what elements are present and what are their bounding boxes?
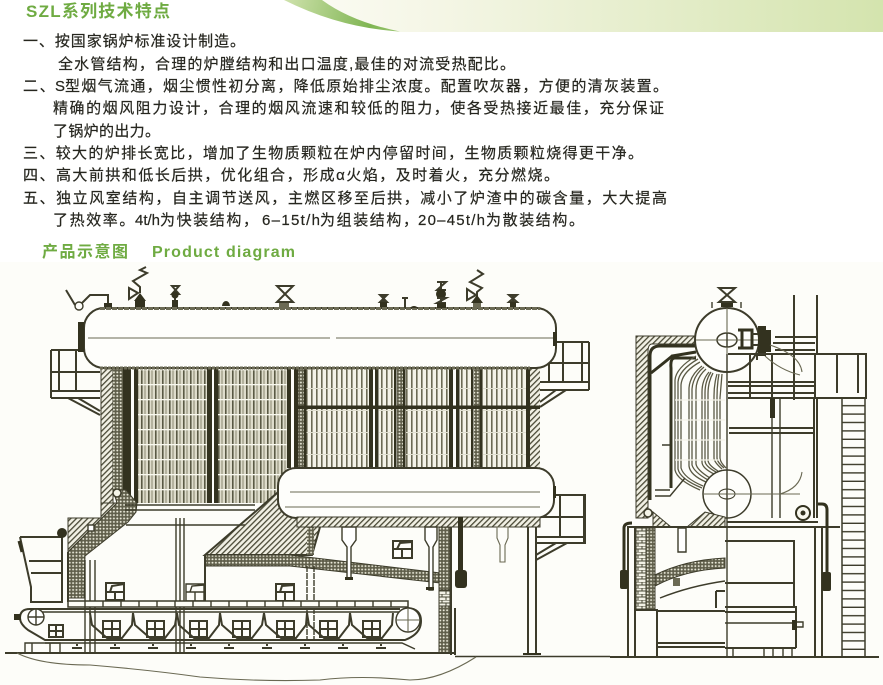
rear wall and right column (439, 527, 541, 655)
text block: feature list: 精确的烟风阻力设计，合理的烟风流速和较低的阻力，使各受热接近最佳，充分保证 (53, 99, 664, 117)
section heading: product diagram: 产品示意图 (42, 242, 128, 261)
funnels with air-chamber windows (49, 613, 393, 638)
side columns and spring pipes (620, 504, 831, 657)
grate bars (68, 601, 408, 607)
text block: feature list: 型烟气流通，烟尘惯性初分离，降低原始排尘浓度。配置吹灰器，方便的清灰装置。 (65, 78, 668, 95)
rear arch section: gravel band (655, 528, 725, 598)
text block: feature list: 二、 (23, 78, 56, 95)
text block: feature list: 6–15t/h (262, 212, 320, 229)
icon: large gate valve (277, 286, 293, 309)
ground line and terrain (5, 653, 610, 681)
text block: feature list: 4t/h (135, 212, 160, 229)
hangers and spring pipe (342, 517, 508, 590)
access windows above grate (106, 541, 412, 601)
text block: feature list (23, 33, 668, 229)
text block: feature list: 五、独立风室结构，自主调节送风，主燃区移至后拱，减小了炉渣中的碳含量，大大提高 (23, 189, 667, 207)
icon: steam pipe with loop (66, 290, 112, 310)
icon: globe valve (172, 286, 179, 307)
text block: feature list: 一、按国家锅炉标准设计制造。 (23, 33, 245, 50)
left wall: hatched insulation (101, 367, 123, 505)
text block: feature list: 了锅炉的出力。 (53, 123, 160, 140)
section heading: product diagram (42, 242, 295, 261)
upper drum (78, 308, 557, 368)
valves and fittings on upper drum (66, 267, 517, 310)
brick column and gravel lining (636, 528, 655, 610)
tube banks: convection section (298, 368, 540, 470)
icon: small valve B with dome (402, 298, 418, 308)
text block: feature list: S (55, 78, 65, 95)
platforms: left and right upper and lower (51, 342, 589, 560)
lower mud drum (703, 470, 800, 518)
ladder (842, 398, 865, 657)
column lines and beams (85, 505, 255, 653)
text block: feature list: 为快装结构， (160, 212, 260, 229)
diagram: boiler end elevation (610, 288, 879, 657)
text block: feature list: 20–45t/h (418, 212, 485, 229)
rear arch: hatched with gravel band (205, 493, 440, 640)
travelling chain grate (14, 601, 421, 653)
header band: green gradient swoosh (284, 0, 883, 32)
steel frame and platform (727, 295, 866, 657)
furnace base and front box (635, 541, 803, 657)
text block: feature list: 三、较大的炉排长宽比，增加了生物质颗粒在炉内停留时间，生物质颗粒烧得更干净。 (23, 144, 643, 162)
text block: feature list: 为散装结构。 (486, 212, 586, 229)
ground line (610, 656, 879, 658)
outer wall: hatched (636, 336, 696, 518)
foot box (25, 643, 60, 653)
icon: small valve C (509, 295, 517, 307)
page background: drawing paper (0, 262, 883, 685)
tube banks: furnace section (123, 368, 298, 503)
icon: safety valve right (467, 270, 483, 308)
front arch and hopper wall (68, 489, 137, 598)
fuel hopper (19, 528, 68, 602)
under-drum hatched funnels and beam (627, 506, 840, 527)
text block: feature list: 全水管结构，合理的炉膛结构和出口温度,最佳的对流受热配比。 (58, 55, 515, 73)
section heading: product diagram: Product diagram (152, 244, 295, 261)
title: SZL technical features: SZL系列技术特点 (26, 1, 170, 21)
support feet (72, 645, 386, 648)
icon: safety valve left (129, 267, 147, 307)
icon: dome fitting (222, 301, 230, 306)
text block: feature list: 了热效率。 (53, 212, 136, 229)
text block: feature list: 四、高大前拱和低长后拱，优化组合，形成α火焰，及时着火，充分燃烧。 (23, 166, 559, 184)
lower drum and slab (278, 468, 556, 527)
icon: small valve A (380, 295, 387, 307)
icon: double valve (436, 282, 446, 308)
water tube bundle (655, 356, 726, 496)
upper steam drum (695, 308, 760, 372)
chain track and pulleys (14, 608, 421, 649)
text block: feature list: 为组装结构， (320, 212, 420, 229)
top valve and drum fittings (712, 288, 771, 360)
diagram: boiler side elevation (5, 267, 610, 681)
